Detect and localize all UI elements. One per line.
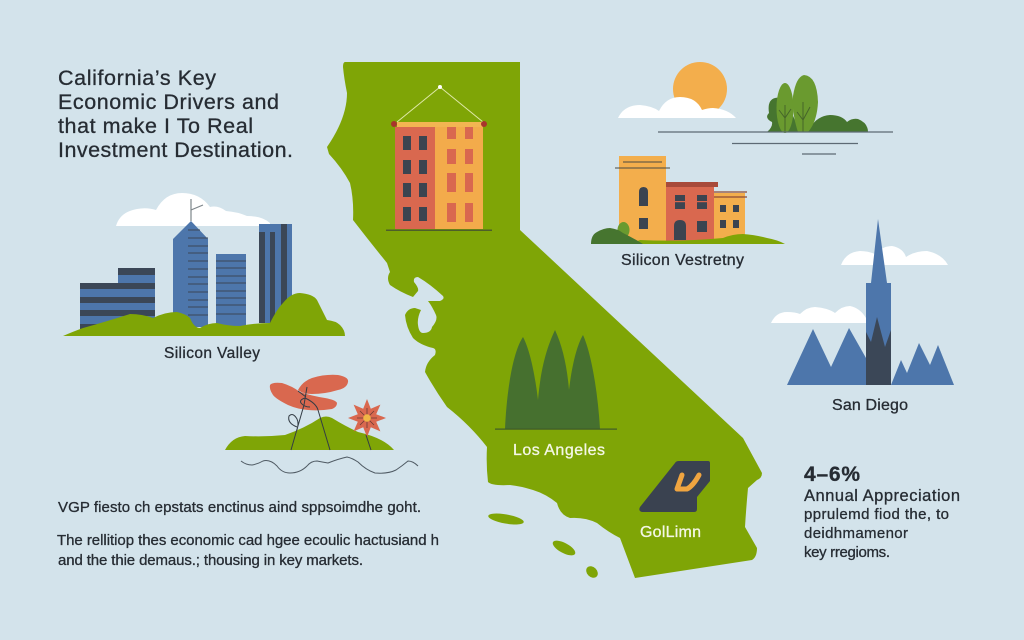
paragraph: lower left: VGP fiesto ch epstats enctinus aind sppsoimdhe goht. <box>58 499 421 516</box>
title: California’s Key <box>58 66 216 90</box>
map of California <box>327 62 762 580</box>
title <box>58 66 293 162</box>
illustration: flowers on a hill <box>225 375 418 473</box>
illustration: Silicon Vestretny buildings <box>591 156 785 244</box>
illustration: sun, clouds and trees <box>618 62 893 154</box>
stat callout <box>804 463 960 561</box>
illustration: conifer trees <box>495 330 617 430</box>
label: San Diego: San Diego <box>832 397 908 414</box>
label: Los Angeles: Los Angeles <box>513 442 605 459</box>
icon: dark badge with orange mark <box>639 461 710 512</box>
paragraph: lower left: The rellitiop thes economic cad hgee ecoulic hactusiand h <box>57 532 439 549</box>
illustration: Silicon Valley skyline <box>63 193 345 336</box>
illustration: San Diego tower and mountains <box>771 219 954 385</box>
title: Economic Drivers and <box>58 90 279 114</box>
stat callout: Annual Appreciation <box>804 487 960 505</box>
wave line <box>241 457 418 473</box>
islands <box>487 511 600 580</box>
paragraph: lower left <box>57 499 439 569</box>
stat callout: 4–6% <box>804 463 860 486</box>
title: Investment Destination. <box>58 138 293 162</box>
stat callout: key rregioms. <box>804 544 890 561</box>
stat callout: pprulemd fiod the, to <box>804 506 949 523</box>
label: Silicon Valley: Silicon Valley <box>164 345 260 362</box>
label: Silicon Vestretny: Silicon Vestretny <box>621 252 744 269</box>
paragraph: lower left: and the thie demaus.; thousing in key markets. <box>58 552 363 569</box>
stat callout: deidhmamenor <box>804 525 908 542</box>
title: that make I To Real <box>58 114 253 138</box>
label: GolLimn: GolLimn <box>640 524 701 541</box>
flower <box>348 399 386 437</box>
illustration: apartment building <box>386 85 492 231</box>
